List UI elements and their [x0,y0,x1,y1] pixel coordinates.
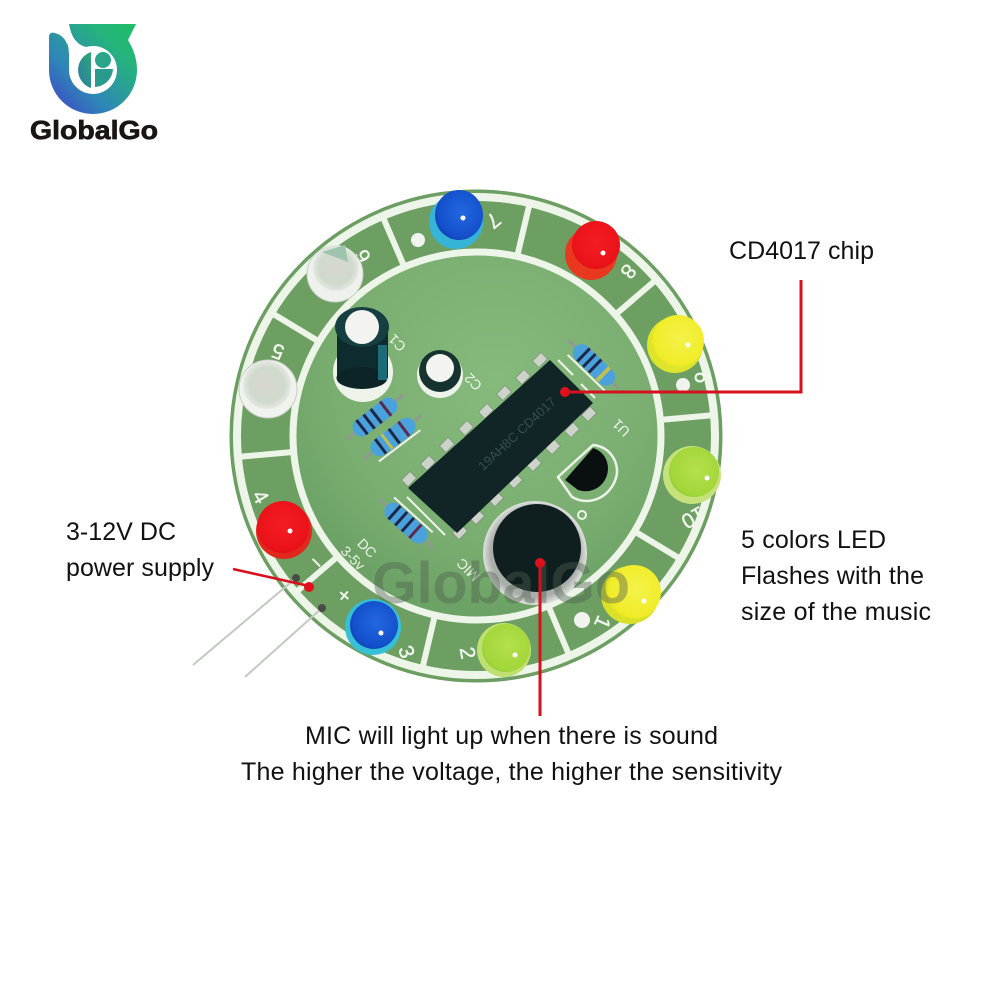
LED clear top [307,245,363,302]
segment numbers: 3 [393,643,419,661]
inner pcb area [293,252,661,620]
segment numbers: 1 [589,612,615,632]
power label: 3-5v [338,543,368,573]
solder holes [292,574,300,582]
outer silkscreen ring [237,197,715,675]
callout: LED: size of the music [741,598,931,626]
segment numbers [247,207,715,661]
watermark: GlobalGo [372,551,630,616]
LED red top [565,221,620,280]
callout: CD4017 chip [560,237,874,397]
CD4017 chip: 19AH8C CD4017 [475,394,559,473]
LED red left [256,501,312,559]
logo mark [49,24,137,114]
power label: DC [354,535,380,561]
callout: power supply: 3-12V DC [66,518,176,546]
segment numbers: 4 [247,486,273,508]
microphone [453,501,587,605]
microphone: MIC [453,555,483,585]
mounting holes [411,233,690,628]
LED yellow top [647,315,704,373]
segment numbers: 10 [677,501,709,533]
capacitor C1: C1 [385,331,409,355]
capacitor C2 [417,350,485,398]
logo wordmark: GlobalGo [30,115,158,145]
LED blue top [429,190,483,249]
transistor [558,445,617,519]
segment numbers: 5 [269,338,287,364]
LED green right [663,446,721,504]
callout: MIC: The higher the voltage, the higher the sensitivity [241,758,782,786]
CD4017 chip: U1 [609,416,633,440]
LED green bottom [477,623,531,677]
capacitor C1 [333,307,409,402]
solder hole plus [318,604,326,612]
capacitor C2: C2 [461,370,485,394]
resistors [341,334,625,554]
inner silkscreen ring [293,252,661,620]
segment dividers [237,202,715,670]
CD4017 chip [402,353,633,539]
segment numbers: 9 [691,370,715,386]
callout: CD4017 chip: CD4017 chip [729,237,874,265]
lead wires [193,578,322,677]
segment numbers: + [332,583,356,609]
LED blue bottom [345,599,401,655]
circuit board [193,190,722,682]
pcb disc [230,190,722,682]
LEDs [239,190,721,677]
callout: MIC: MIC will light up when there is sound [305,722,718,750]
segment numbers: 2 [455,645,479,661]
logo [30,24,158,145]
LED yellow bottom [601,565,661,624]
callout: LED: 5 colors LED [741,526,886,554]
segment numbers: 8 [615,259,641,283]
segment numbers: 6 [350,246,376,266]
callout: power supply: power supply [66,554,214,582]
callout: LED [741,526,931,626]
callout: MIC [241,558,782,786]
callout: LED: Flashes with the [741,562,924,590]
LED clear left [239,360,297,418]
segment numbers: − [304,551,328,575]
segment numbers: 7 [481,207,505,233]
power label [338,535,380,573]
callout: power supply [66,518,314,592]
